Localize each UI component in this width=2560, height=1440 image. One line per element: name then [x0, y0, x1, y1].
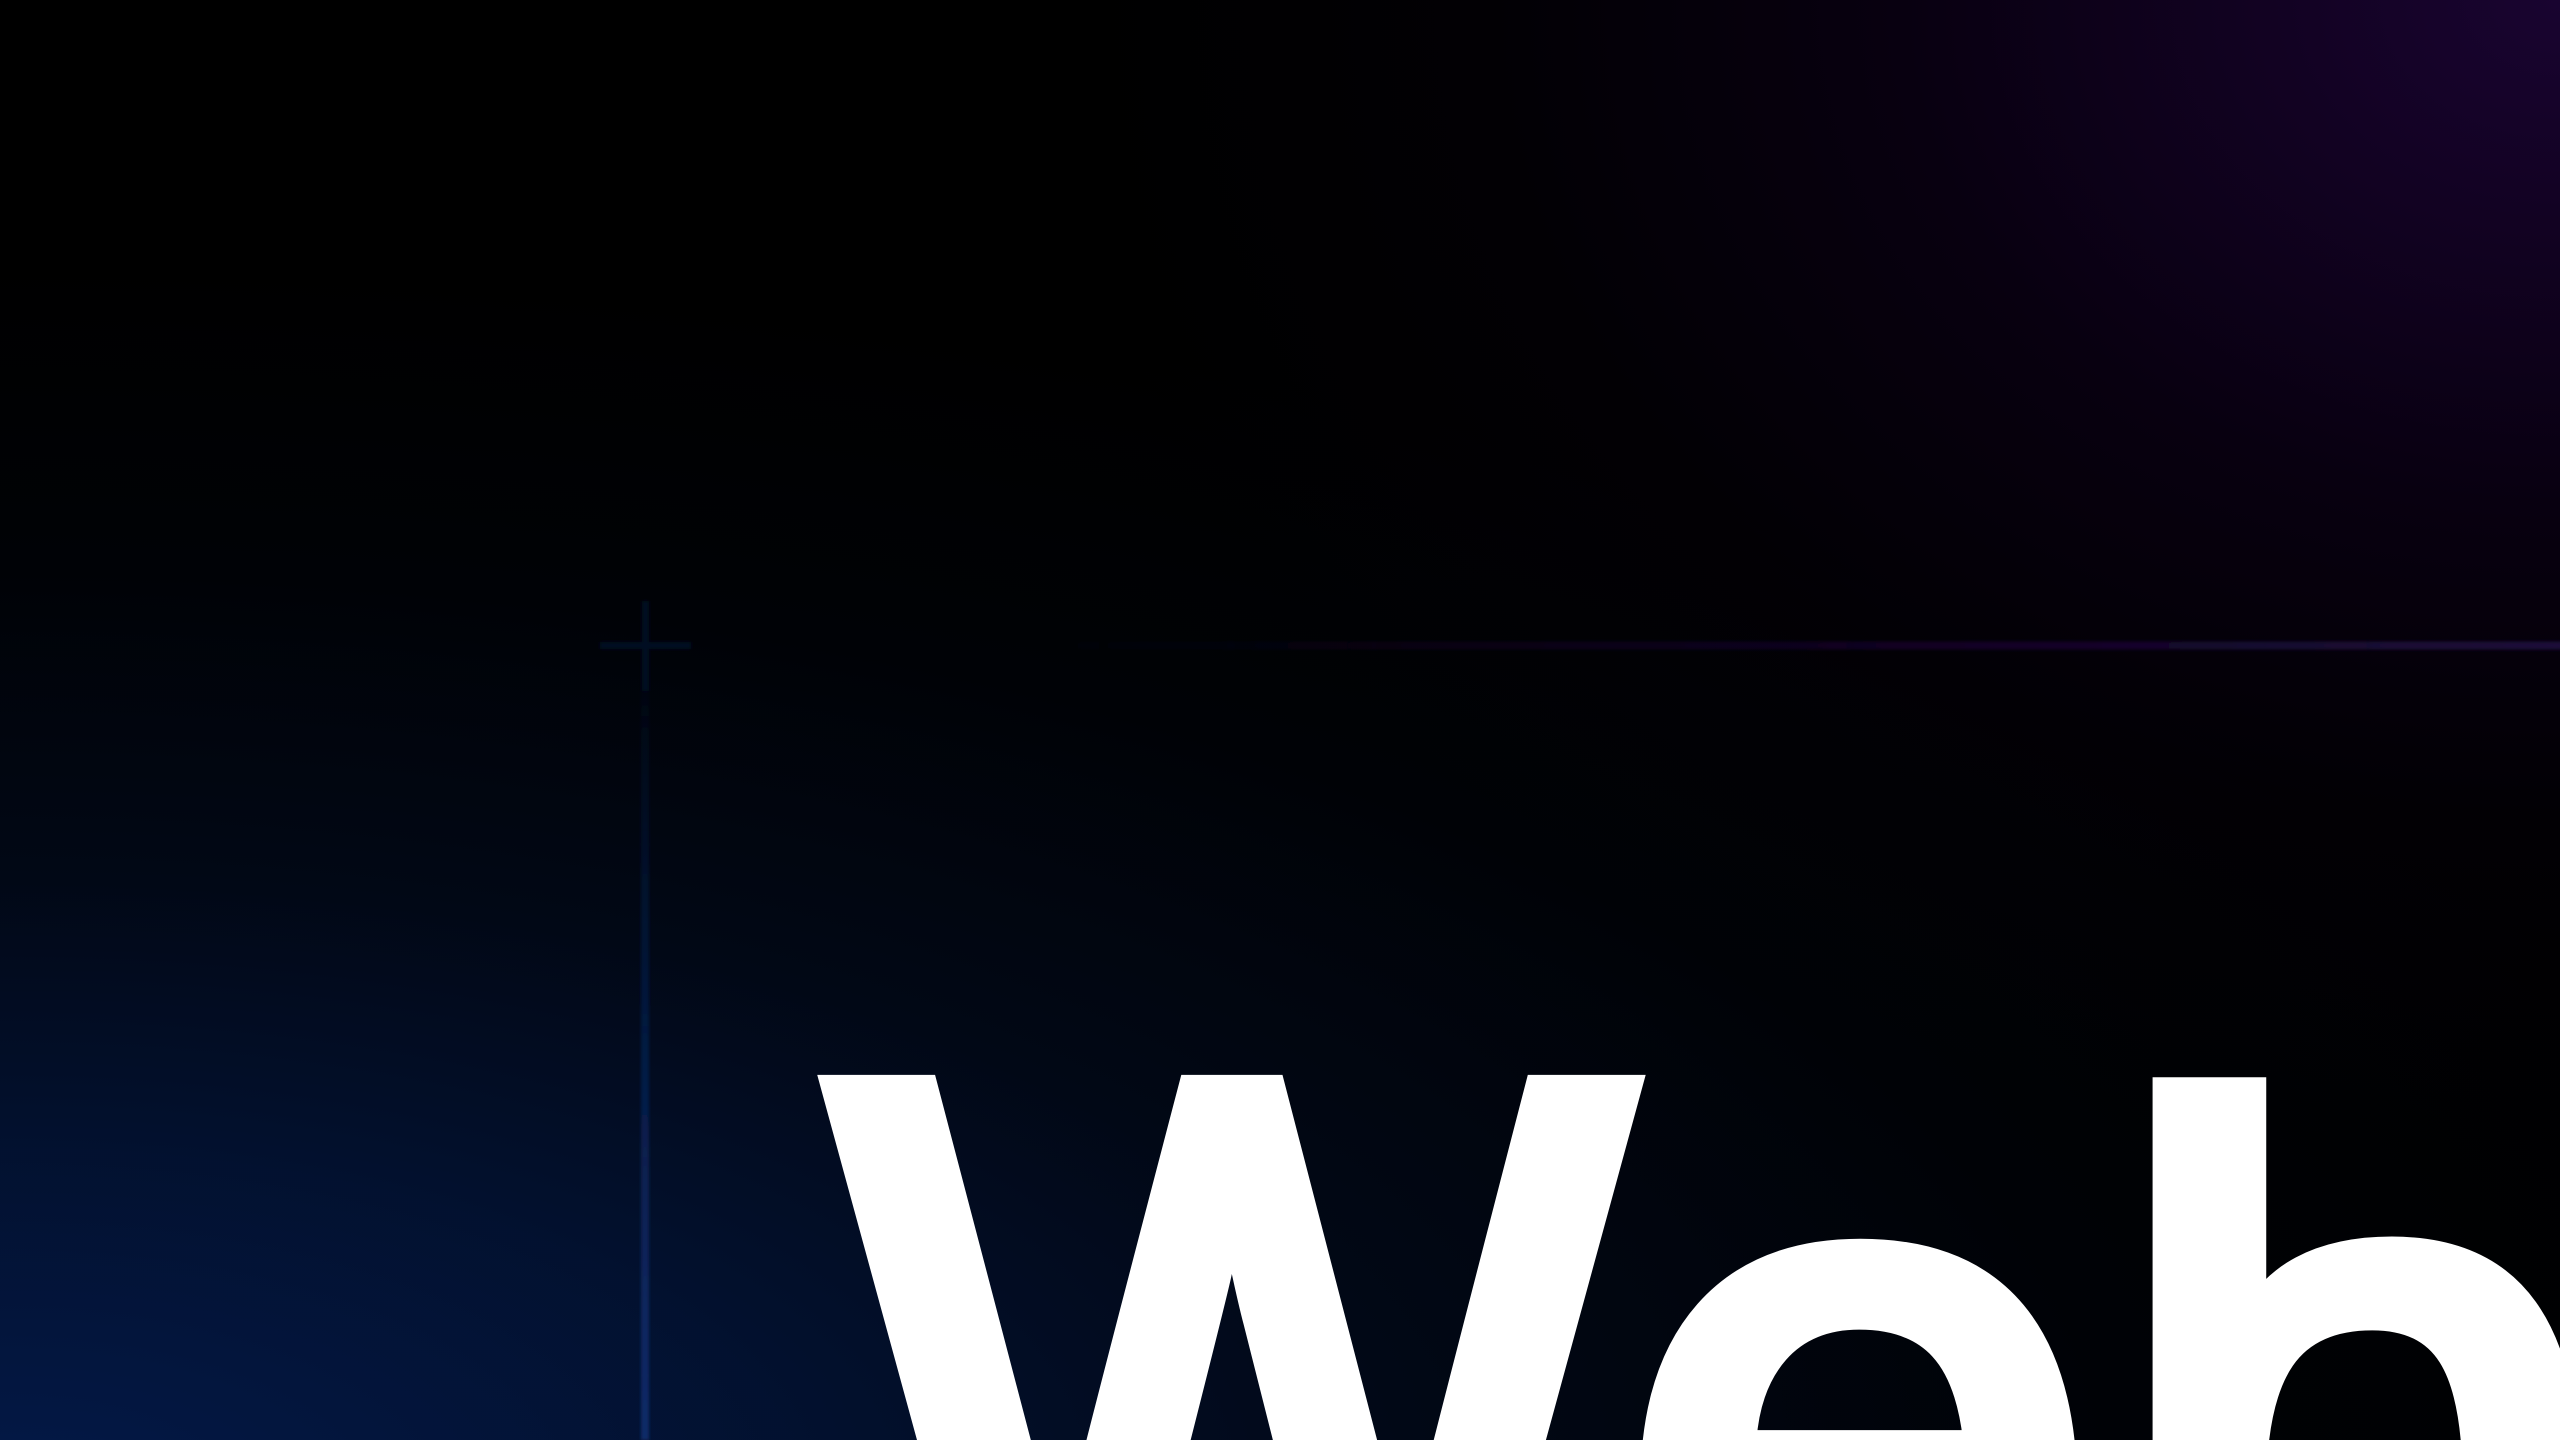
horizontal line	[1000, 642, 2560, 650]
vertical line	[641, 690, 649, 1440]
cross marker	[600, 601, 691, 691]
